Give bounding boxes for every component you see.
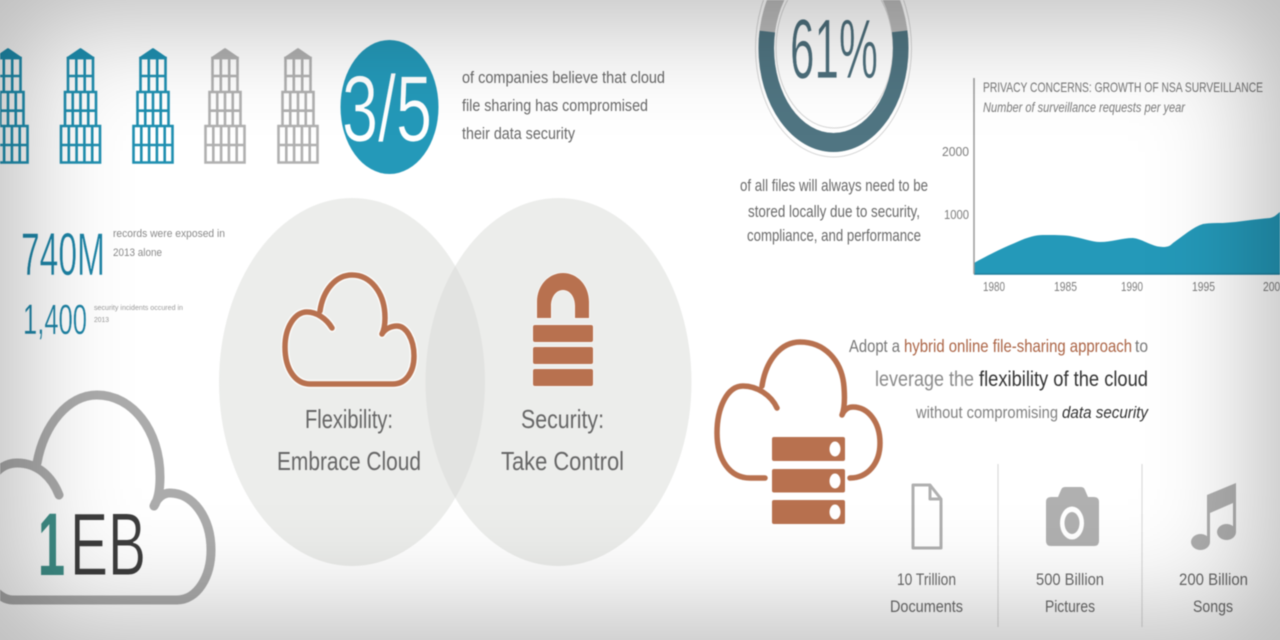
label: flexibility: Flexibility: [305,404,393,434]
venn diagram: flexibility and security [219,198,692,566]
text: companies believe [462,68,665,143]
y axis labels: 2000 [942,144,969,159]
label: flexibility: Embrace Cloud [277,446,421,476]
icon: padlock [533,273,593,386]
icon: building 1 (blue) [0,50,28,163]
line 1: to [1135,336,1148,356]
area chart: NSA surveillance [942,78,1280,294]
line 3: data security [1062,403,1149,422]
text: files stored locally: of all files will always need to be [740,177,928,195]
area series [974,212,1280,274]
stat: 500 billion pictures [1036,487,1104,616]
text: 1EB: EB [70,494,146,594]
text: 1EB [38,494,146,594]
text: files stored locally: compliance, and performance [747,227,921,245]
stat: 500 billion pictures: Pictures [1045,597,1095,616]
x axis labels: 1985 [1054,279,1077,294]
x axis labels [983,279,1280,294]
badge: 3/5: 3/5 [342,56,432,161]
stat: 200 billion songs [1179,483,1248,616]
icon: 1EB cloud [0,395,211,600]
x axis labels: 1980 [983,279,1005,294]
stat: 740M records: 740M [21,221,105,288]
line 2 [875,368,1148,391]
x axis labels: 1995 [1192,279,1215,294]
text: companies believe: their data security [462,124,575,143]
label: flexibility [277,404,421,476]
text: 61%: 61% [790,2,878,96]
icon: building 2 (blue) [61,50,100,163]
stat: 1,400 incidents: 2013 [94,315,109,324]
icon: document [913,485,941,548]
text: companies believe: of companies believe that cloud [462,68,665,87]
icon: building 3 (blue) [134,50,172,163]
label: security [501,404,624,476]
stat: 10 trillion documents: 10 Trillion [897,570,956,589]
y axis labels: 1000 [944,207,969,222]
badge: 3/5 [340,40,438,174]
building row: 3 of 5 companies [0,50,318,163]
stat: 200 billion songs: Songs [1193,597,1233,616]
line 3: without compromising [915,403,1058,422]
stat: 10 trillion documents: Documents [890,597,963,616]
stat: 740M records: records were exposed in [113,228,225,240]
line 2: leverage the [875,368,974,391]
text: files stored locally: stored locally due to security, [748,203,920,221]
text: hybrid approach message [849,336,1149,422]
stat: 740M records: 2013 alone [113,247,162,259]
icon: camera [1046,487,1099,546]
stat: 10 trillion documents [890,485,963,616]
line 1: Adopt a [849,336,900,356]
line 1: hybrid online file-sharing approach [904,336,1132,356]
stat: 1,400 incidents: security incidents occured in [94,303,183,312]
y axis labels [942,144,969,222]
stat: 500 billion pictures: 500 Billion [1036,570,1104,589]
icon: music note [1191,483,1236,550]
chart subtitle: Number of surveillance requests per year [983,100,1185,115]
label: security: Security: [521,404,604,434]
stat: 1,400 incidents [23,296,183,344]
text: 1EB: 1 [38,494,65,594]
text: companies believe: file sharing has compromised [462,96,648,115]
stat: 1,400 incidents: 1,400 [23,296,87,344]
x axis labels: 1990 [1121,279,1143,294]
stat: 200 billion songs: 200 Billion [1179,570,1248,589]
text: files stored locally [740,177,928,245]
icon: building 5 (gray) [278,50,318,163]
icon: cloud with servers [717,342,880,524]
label: security: Take Control [501,446,624,476]
icon: outline cloud [285,275,414,384]
line 2: flexibility of the cloud [979,368,1148,391]
icon: building 4 (gray) [206,50,244,163]
donut chart: 61% [756,0,912,157]
